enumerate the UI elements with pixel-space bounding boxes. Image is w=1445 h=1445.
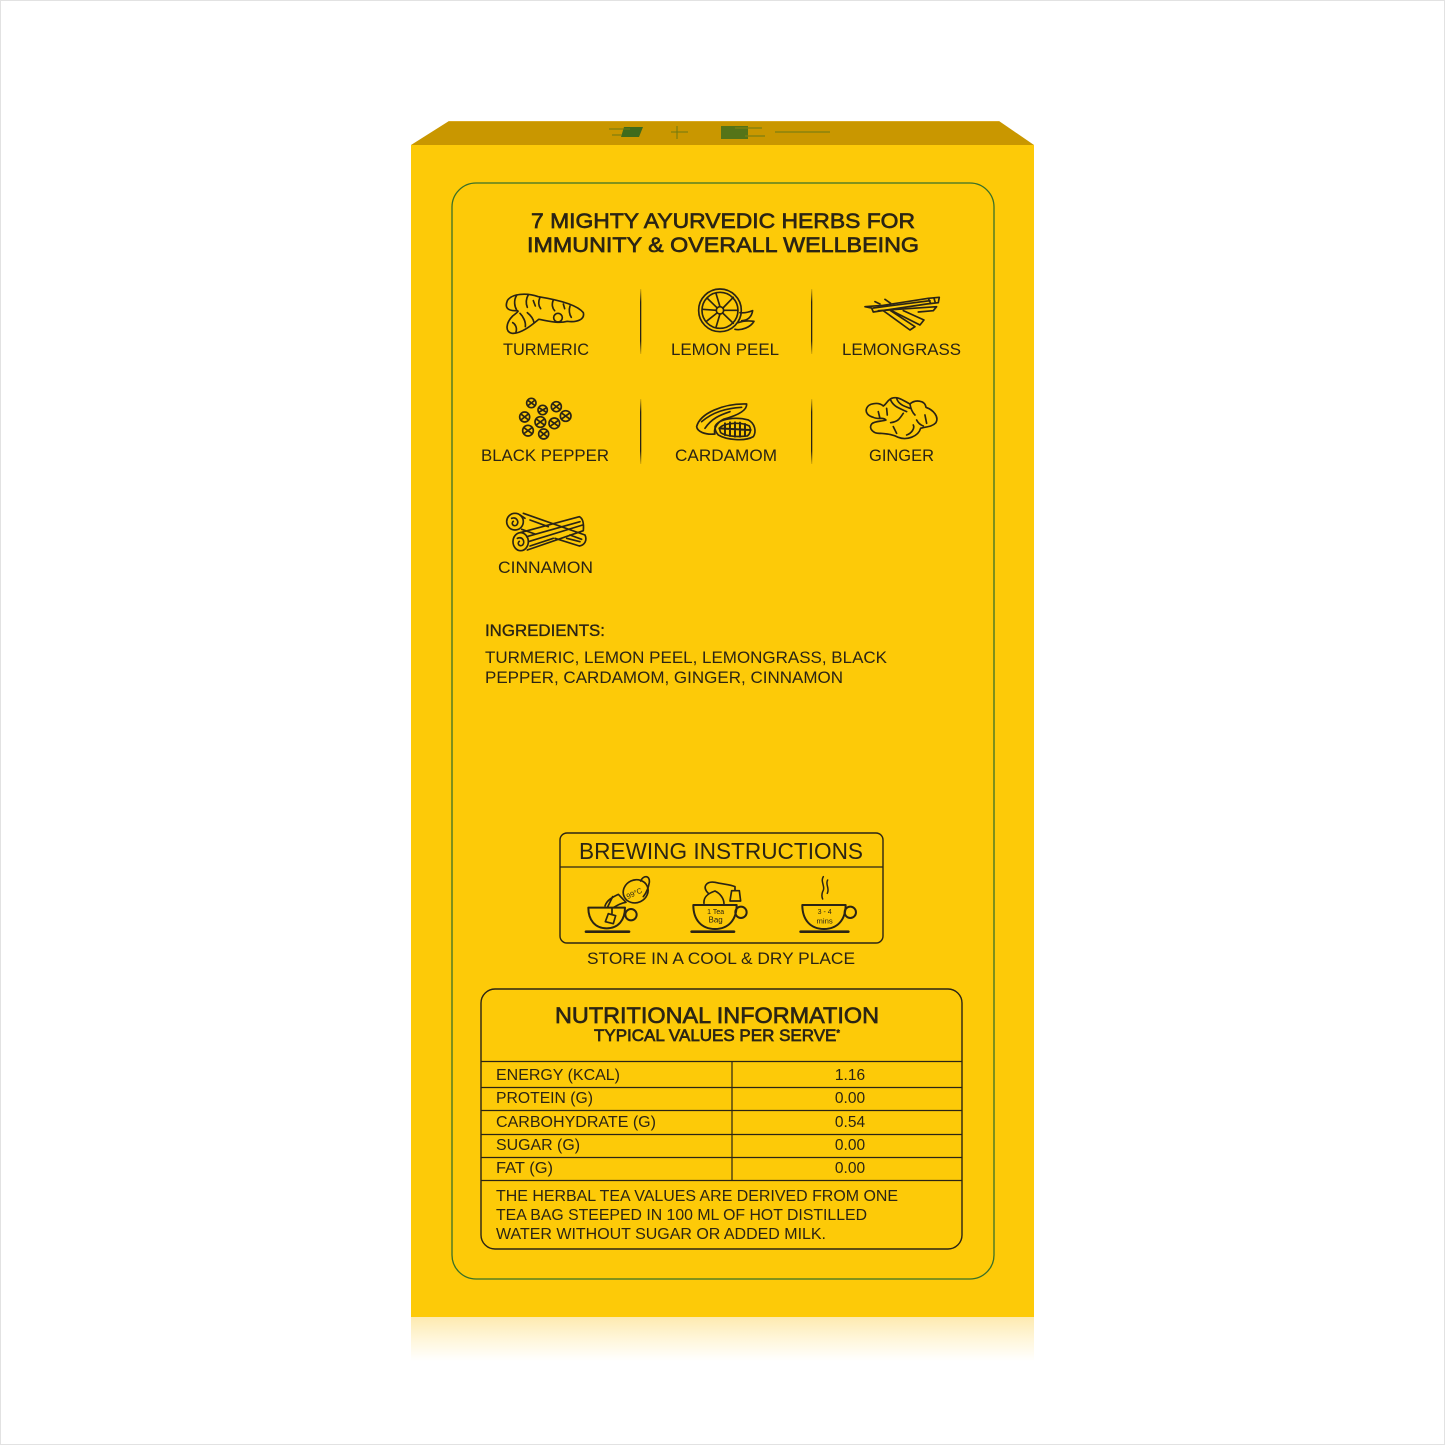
icon: lemon xyxy=(699,289,754,332)
herb: turmeric xyxy=(503,294,589,359)
herb: lemongrass xyxy=(842,297,961,359)
tea bag label xyxy=(707,909,724,925)
nutrition table rows: SUGAR (G) xyxy=(496,1137,580,1154)
box front face xyxy=(411,145,1034,1317)
nutrition heading: TYPICAL VALUES PER SERVE xyxy=(594,1027,829,1045)
nutrition heading xyxy=(555,1003,879,1045)
icon: ginger xyxy=(866,398,937,438)
herb: ginger xyxy=(866,398,937,465)
nutrition table rows: PROTEIN (G) xyxy=(496,1090,593,1107)
nutrition table rows xyxy=(496,1067,865,1177)
heading: 7 MIGHTY AYURVEDIC HERBS FOR xyxy=(531,210,915,233)
panel: nutritional information xyxy=(481,989,962,1249)
icon: one tea bag xyxy=(692,882,747,932)
box floor reflection xyxy=(411,1317,1034,1361)
tea bag label: 1 Tea xyxy=(707,909,724,916)
nutrition footnote: WATER WITHOUT SUGAR OR ADDED MILK. xyxy=(496,1226,826,1243)
nutrition footnote: THE HERBAL TEA VALUES ARE DERIVED FROM ONE xyxy=(496,1188,898,1205)
storage note: STORE IN A COOL & DRY PLACE xyxy=(587,950,855,968)
steep time label: 3 - 4 xyxy=(818,909,832,916)
nutrition heading: NUTRITIONAL INFORMATION xyxy=(555,1003,879,1028)
nutrition table rows: CARBOHYDRATE (G) xyxy=(496,1114,656,1131)
herb: lemon peel xyxy=(671,289,779,359)
label: black pepper: BLACK PEPPER xyxy=(481,447,609,465)
heading: IMMUNITY & OVERALL WELLBEING xyxy=(527,234,919,257)
icon: cardamom xyxy=(697,404,755,440)
99 degrees label: 99°C xyxy=(625,886,644,901)
brewing heading: BREWING INSTRUCTIONS xyxy=(579,838,863,864)
ingredients list: TURMERIC, LEMON PEEL, LEMONGRASS, BLACK xyxy=(485,649,887,667)
nutrition table rows: 0.00 xyxy=(835,1160,865,1177)
icon: black pepper xyxy=(520,398,571,439)
label: lemon peel: LEMON PEEL xyxy=(671,341,779,359)
heading xyxy=(527,210,919,257)
nutrition heading: * xyxy=(836,1028,840,1038)
icon: cinnamon xyxy=(507,513,586,551)
nutrition footnote xyxy=(496,1188,898,1243)
herb: cardamom xyxy=(675,404,777,465)
icon: pour water into cup xyxy=(586,876,652,932)
herb: black pepper xyxy=(481,398,609,465)
icon: steep minutes xyxy=(801,877,856,932)
steep time label xyxy=(817,909,833,925)
label: lemongrass: LEMONGRASS xyxy=(842,341,961,359)
icon: turmeric xyxy=(506,294,584,333)
tea bag label: Bag xyxy=(709,916,723,925)
nutrition table rows: ENERGY (KCAL) xyxy=(496,1067,620,1084)
nutrition table rows: 0.54 xyxy=(835,1114,865,1131)
icon: lemongrass xyxy=(865,297,939,330)
steep time label: mins xyxy=(817,916,833,925)
label: turmeric: TURMERIC xyxy=(503,341,589,359)
green inner frame xyxy=(452,183,994,1279)
nutrition table rows: FAT (G) xyxy=(496,1160,553,1177)
label: ginger: GINGER xyxy=(869,447,934,465)
ingredients list xyxy=(485,649,887,687)
herb: cinnamon xyxy=(498,513,593,577)
nutrition table rows: 0.00 xyxy=(835,1137,865,1154)
nutrition table rows: 0.00 xyxy=(835,1090,865,1107)
ingredients xyxy=(485,622,887,687)
nutrition footnote: TEA BAG STEEPED IN 100 ML OF HOT DISTILLED xyxy=(496,1207,867,1224)
panel: brewing instructions xyxy=(560,833,883,943)
box top face xyxy=(411,121,1034,145)
nutrition table rows: 1.16 xyxy=(835,1067,865,1084)
label: cardamom: CARDAMOM xyxy=(675,447,777,465)
divider lines between herbs xyxy=(640,289,812,464)
ingredients heading: INGREDIENTS: xyxy=(485,622,605,640)
label: cinnamon: CINNAMON xyxy=(498,559,593,577)
ingredients list: PEPPER, CARDAMOM, GINGER, CINNAMON xyxy=(485,669,843,687)
